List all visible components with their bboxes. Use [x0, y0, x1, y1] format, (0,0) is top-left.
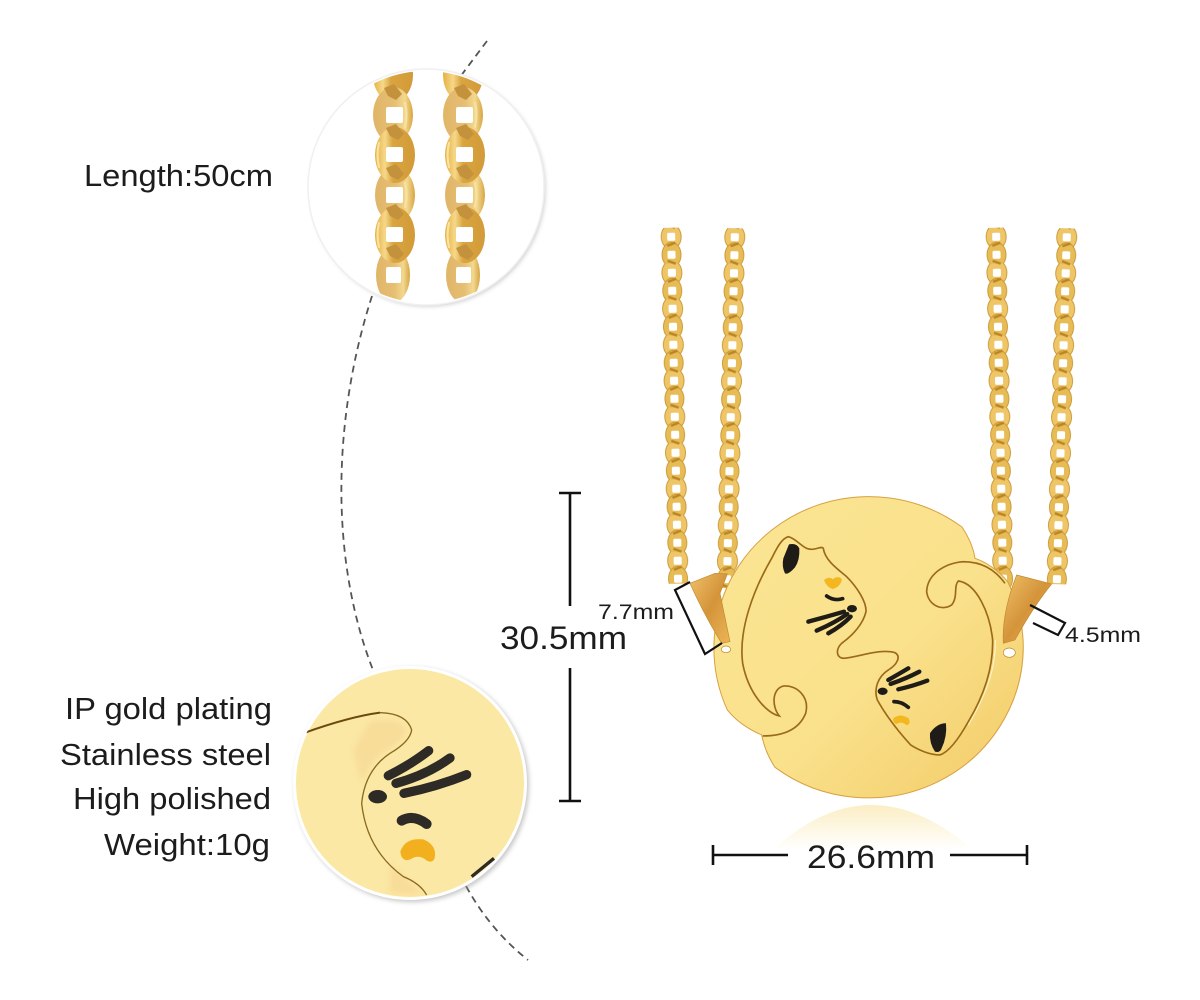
left cat nose: [824, 577, 842, 589]
text block: materials and weight: Weight:10g: [104, 827, 270, 862]
text block: materials and weight: [60, 691, 272, 862]
left cat ear: [783, 544, 799, 574]
seam highlight: [968, 640, 995, 725]
dimension: width 26.6mm: 26.6mm: [807, 839, 935, 875]
dashed connector curve: [341, 41, 528, 960]
dimension: bail width 4.5mm: [1030, 605, 1141, 647]
text block: materials and weight: High polished: [73, 781, 271, 816]
label: chain length: Length:50cm: [84, 158, 273, 193]
left cat eye: [827, 596, 843, 600]
left bail: [690, 573, 730, 643]
dimension: height 30.5mm: [500, 493, 627, 801]
dimension: bail height 7.7mm: 7.7mm: [598, 601, 674, 624]
right cat nose: [893, 715, 910, 725]
left cat whiskers: [808, 612, 851, 633]
right cat whiskers: [888, 668, 927, 689]
dimension: bail width 4.5mm: 4.5mm: [1065, 624, 1141, 647]
reflection under pendant: [773, 805, 973, 850]
right cat eye: [878, 688, 888, 695]
text block: materials and weight: Stainless steel: [60, 737, 271, 772]
detail circle: cat face close-up: [293, 666, 529, 902]
cat outline seam: [742, 537, 1005, 755]
dimension: bail height 7.7mm: [598, 582, 722, 654]
text block: materials and weight: IP gold plating: [65, 691, 272, 726]
right cat ear: [930, 723, 946, 752]
right bail: [1003, 575, 1052, 643]
pendant: two interlocking cats: [690, 497, 1052, 798]
dimension: height 30.5mm: 30.5mm: [500, 620, 627, 656]
disc body: [714, 497, 1023, 798]
necklace chains: [660, 228, 1078, 588]
detail circle: chain close-up: [308, 48, 545, 306]
dimension: width 26.6mm: [713, 839, 1027, 875]
